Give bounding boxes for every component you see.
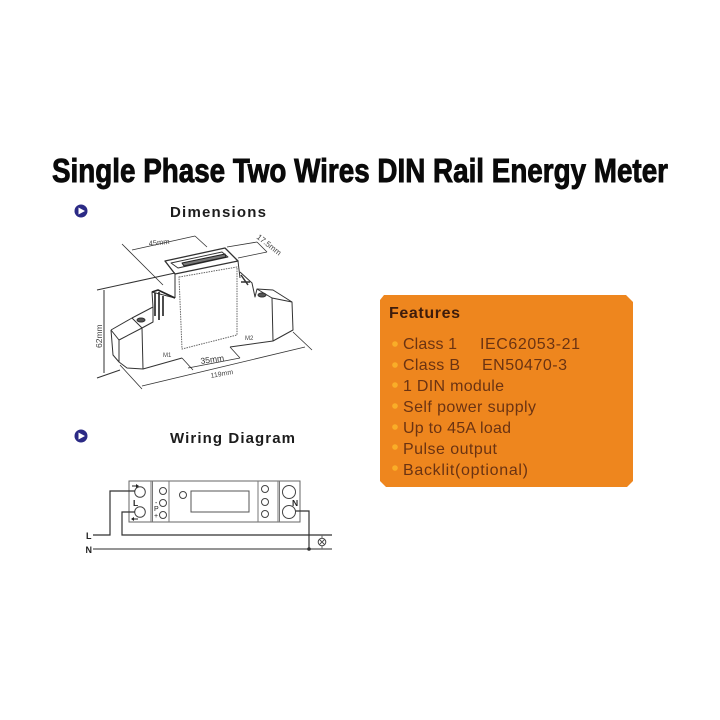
dimension: 62mm: 62mm xyxy=(94,324,104,348)
terminal labels: L xyxy=(133,498,138,508)
dimensions drawing xyxy=(94,232,312,389)
panel: features xyxy=(380,295,633,487)
dimension: 119mm: 119mm xyxy=(210,369,234,380)
feature list xyxy=(403,336,580,479)
feature list: Class B xyxy=(403,357,460,374)
feature list: Self power supply xyxy=(403,399,536,416)
panel heading: Features xyxy=(389,305,460,322)
icon: lamp xyxy=(318,538,326,546)
terminal labels: + xyxy=(154,513,158,520)
feature list: Class 1 xyxy=(403,336,457,353)
terminal labels: - xyxy=(155,500,158,507)
heading: wiring diagram: Wiring Diagram xyxy=(170,430,295,447)
wiring diagram xyxy=(86,481,332,555)
dimension: 62mm xyxy=(94,273,175,378)
icon: wiring bullet xyxy=(74,430,88,442)
feature list: 1 DIN module xyxy=(403,378,504,395)
terminal labels xyxy=(86,484,298,555)
dimension: 35mm: 35mm xyxy=(200,353,225,366)
terminal labels: N xyxy=(86,545,92,555)
terminal labels: N xyxy=(292,498,298,508)
dimension: 45mm xyxy=(122,236,207,285)
dimension: 35mm xyxy=(182,347,240,370)
heading: dimensions: Dimensions xyxy=(170,204,266,221)
bullets xyxy=(392,341,398,471)
terminal labels: P xyxy=(154,506,159,513)
label: din marks xyxy=(163,336,254,359)
label: din marks: M1 xyxy=(163,353,172,359)
feature list: Up to 45A load xyxy=(403,420,511,437)
icon: dimensions bullet xyxy=(74,204,88,218)
terminals xyxy=(135,486,296,518)
meter body xyxy=(111,248,293,369)
dimension: 45mm: 45mm xyxy=(148,237,170,248)
terminal labels: L xyxy=(86,531,92,541)
label: din marks: M2 xyxy=(245,336,254,342)
feature list: IEC62053-21 xyxy=(480,336,580,353)
feature list: Pulse output xyxy=(403,441,498,458)
meter outline xyxy=(129,481,300,522)
wires xyxy=(93,491,332,549)
feature list: EN50470-3 xyxy=(482,357,567,374)
panel background xyxy=(380,295,633,487)
dimension: 17.5mm xyxy=(227,232,283,258)
dimension: 119mm xyxy=(120,332,312,389)
dimension: 17.5mm: 17.5mm xyxy=(255,232,283,258)
feature list: Backlit(optional) xyxy=(403,462,528,479)
